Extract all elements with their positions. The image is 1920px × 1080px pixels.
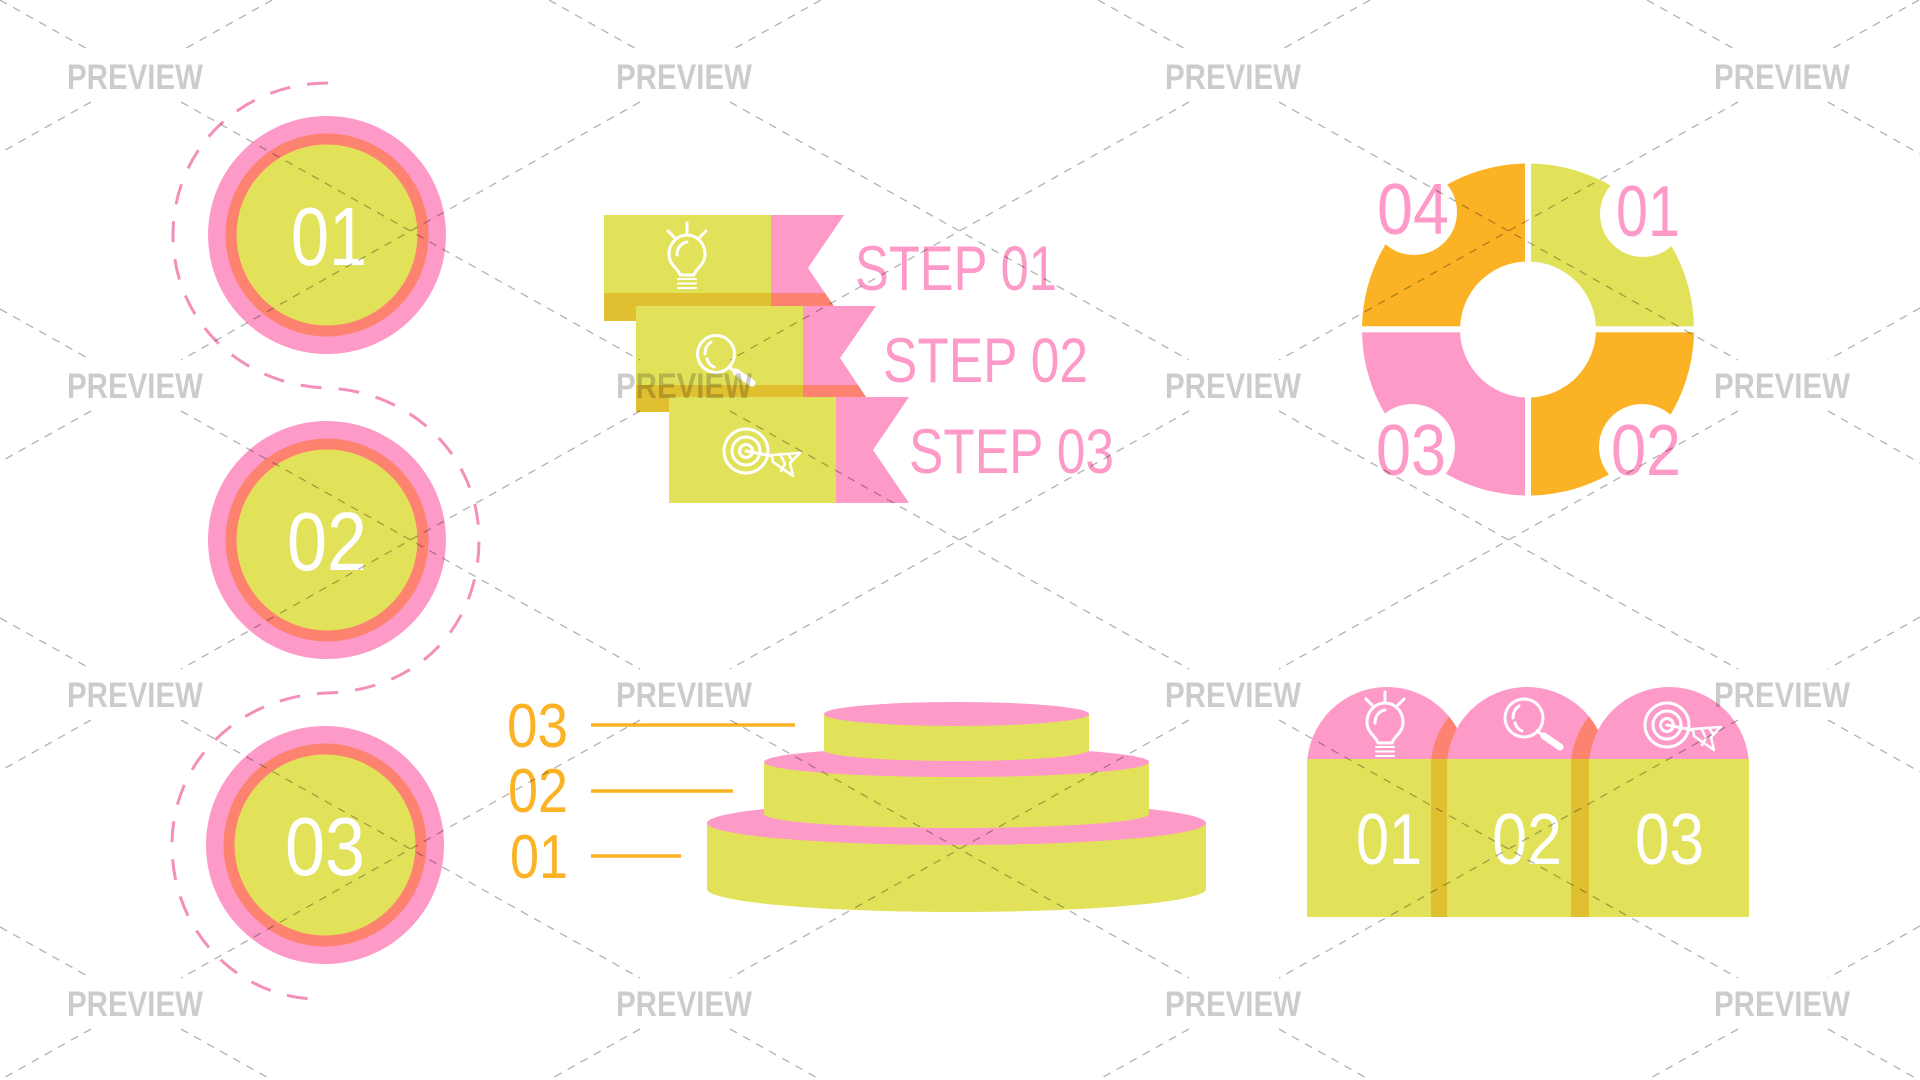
watermark labels: PREVIEW [1714, 676, 1850, 715]
watermark labels: PREVIEW [1714, 985, 1850, 1024]
label step 01: STEP 01 [855, 234, 1057, 304]
leader lines [591, 725, 795, 856]
podium label 02: 02 [508, 757, 568, 826]
label step 03: STEP 03 [909, 417, 1114, 487]
watermark labels: PREVIEW [67, 58, 203, 97]
tier 01 [707, 801, 1206, 912]
tier 02 [764, 747, 1149, 828]
column label 02: 02 [1492, 800, 1562, 880]
panel: numbered circles [206, 116, 446, 964]
watermark labels: PREVIEW [67, 367, 203, 406]
circle 01 [208, 116, 446, 354]
tier 03 [824, 702, 1089, 761]
watermark labels: PREVIEW [1714, 367, 1850, 406]
segment 01 [1528, 164, 1694, 330]
circle 02 [208, 421, 446, 659]
watermark labels: PREVIEW [616, 367, 752, 406]
icon: target with arrow [724, 429, 800, 476]
column label 01: 01 [1356, 800, 1422, 880]
segment 03 [1362, 330, 1528, 496]
ribbon step 01 [604, 215, 1057, 321]
ribbon step 03 [669, 397, 1114, 503]
watermark labels: PREVIEW [616, 985, 752, 1024]
donut label 03: 03 [1376, 411, 1446, 491]
circle 03: 03 [285, 800, 365, 893]
watermark labels: PREVIEW [67, 676, 203, 715]
segment 04 [1362, 164, 1528, 330]
column bodies [1307, 759, 1749, 917]
panel: segmented donut [1355, 155, 1701, 505]
column label 03: 03 [1635, 800, 1704, 880]
circle 02: 02 [287, 495, 367, 588]
icon: magnifier [698, 336, 752, 383]
podium label 03: 03 [507, 692, 568, 761]
donut label 01: 01 [1616, 172, 1680, 252]
watermark labels: PREVIEW [616, 58, 752, 97]
watermark labels: PREVIEW [67, 985, 203, 1024]
ribbon step 02 [636, 306, 1088, 412]
watermark labels: PREVIEW [1165, 367, 1301, 406]
podium label 01: 01 [510, 823, 568, 892]
circle 03 [206, 726, 444, 964]
watermark labels: PREVIEW [1165, 676, 1301, 715]
watermark labels: PREVIEW [1165, 58, 1301, 97]
label step 02: STEP 02 [883, 326, 1088, 396]
arch tops [1308, 687, 1748, 759]
circle 01: 01 [291, 190, 367, 283]
donut label 02: 02 [1611, 411, 1681, 491]
panel: stacked podium [507, 692, 1206, 912]
donut label 04: 04 [1377, 170, 1449, 250]
watermark labels: PREVIEW [616, 676, 752, 715]
watermark labels: PREVIEW [1165, 985, 1301, 1024]
icon: magnifier [1505, 699, 1560, 747]
panel: step ribbons [604, 215, 1114, 503]
icon: target with arrow [1645, 703, 1721, 750]
panel: arch columns [1307, 687, 1749, 917]
segment 02 [1528, 330, 1694, 496]
dashed connector path [172, 83, 479, 999]
icon: light bulb [668, 223, 706, 288]
watermark labels: PREVIEW [1714, 58, 1850, 97]
icon: light bulb [1366, 692, 1404, 756]
